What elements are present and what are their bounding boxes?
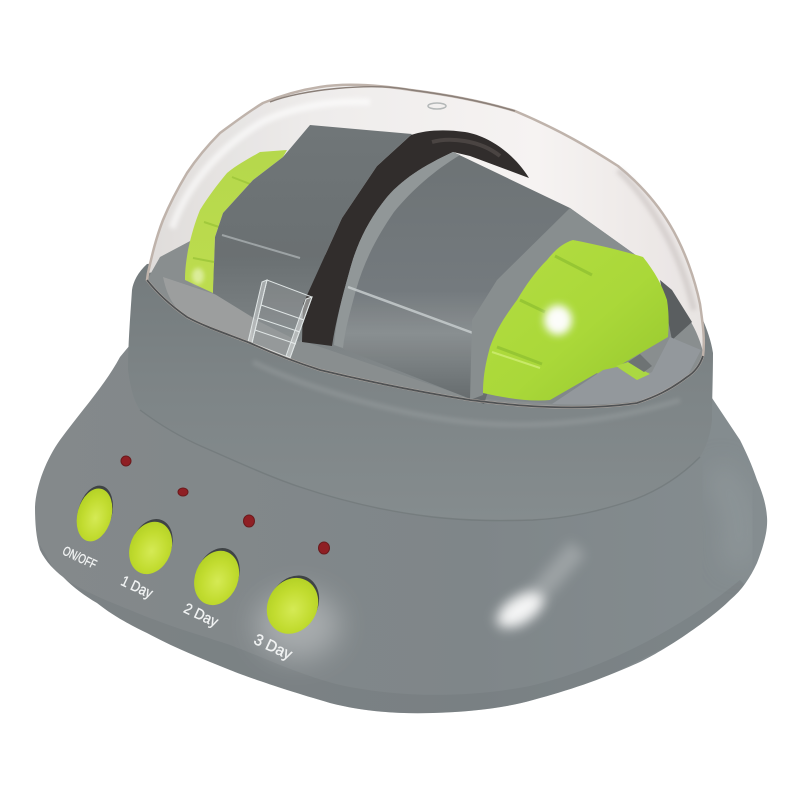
button: 1 day <box>122 512 181 581</box>
housing lighter end band <box>470 208 637 400</box>
button: 2 day <box>186 541 248 612</box>
LED: 3 day <box>318 542 330 554</box>
housing edge highlight <box>348 287 473 333</box>
right grey housing <box>334 152 637 404</box>
metal pin <box>628 354 652 372</box>
dome vent <box>428 103 446 109</box>
label: on/off: ON/OFF <box>60 543 99 572</box>
latch posts <box>248 280 312 358</box>
dome right wall tint <box>618 170 694 310</box>
strap sheen <box>432 140 500 156</box>
glossy inner rim <box>334 152 460 348</box>
button: on/off <box>71 482 119 545</box>
left housing highlight <box>222 235 300 258</box>
dome inner white sheen <box>172 102 370 228</box>
left grey housing <box>213 125 412 342</box>
LED: on/off <box>121 456 131 466</box>
black strap <box>302 130 529 346</box>
label: 2 day: 2 Day <box>181 600 221 631</box>
highlight: glare tail <box>510 548 578 618</box>
base housing <box>30 345 767 730</box>
button: 3 day <box>257 566 330 643</box>
base lower bevel <box>40 548 744 714</box>
glass backing <box>148 85 704 356</box>
LED: 1 day <box>178 488 188 496</box>
dome top edge <box>270 87 515 111</box>
LED: 2 day <box>244 515 254 527</box>
product illustration <box>35 84 768 714</box>
clear latch <box>248 280 312 358</box>
dome interior floor <box>147 240 703 407</box>
drum glint <box>192 268 204 284</box>
clear dome <box>147 85 704 407</box>
drum ridge light <box>492 352 540 368</box>
left green drum <box>185 150 287 293</box>
shelf edge <box>163 277 253 343</box>
dome rim dark line <box>147 280 703 407</box>
highlight: right shoulder <box>715 470 740 565</box>
drum ridges <box>497 256 592 364</box>
indicator lights <box>121 456 330 554</box>
collar sheen <box>253 362 680 425</box>
green clip <box>616 362 650 380</box>
label: 1 day: 1 Day <box>118 573 156 602</box>
right green drum <box>483 240 669 401</box>
upper collar <box>128 240 713 521</box>
highlight: near 3 Day button <box>256 591 340 659</box>
collar crease <box>140 410 700 521</box>
highlight: lower base glare <box>491 585 549 635</box>
shadow behind right drum <box>660 280 692 340</box>
drum ridges <box>193 177 250 262</box>
label: 3 day: 3 Day <box>251 631 295 664</box>
drum shine <box>544 305 572 335</box>
cradle bracket <box>552 337 701 405</box>
